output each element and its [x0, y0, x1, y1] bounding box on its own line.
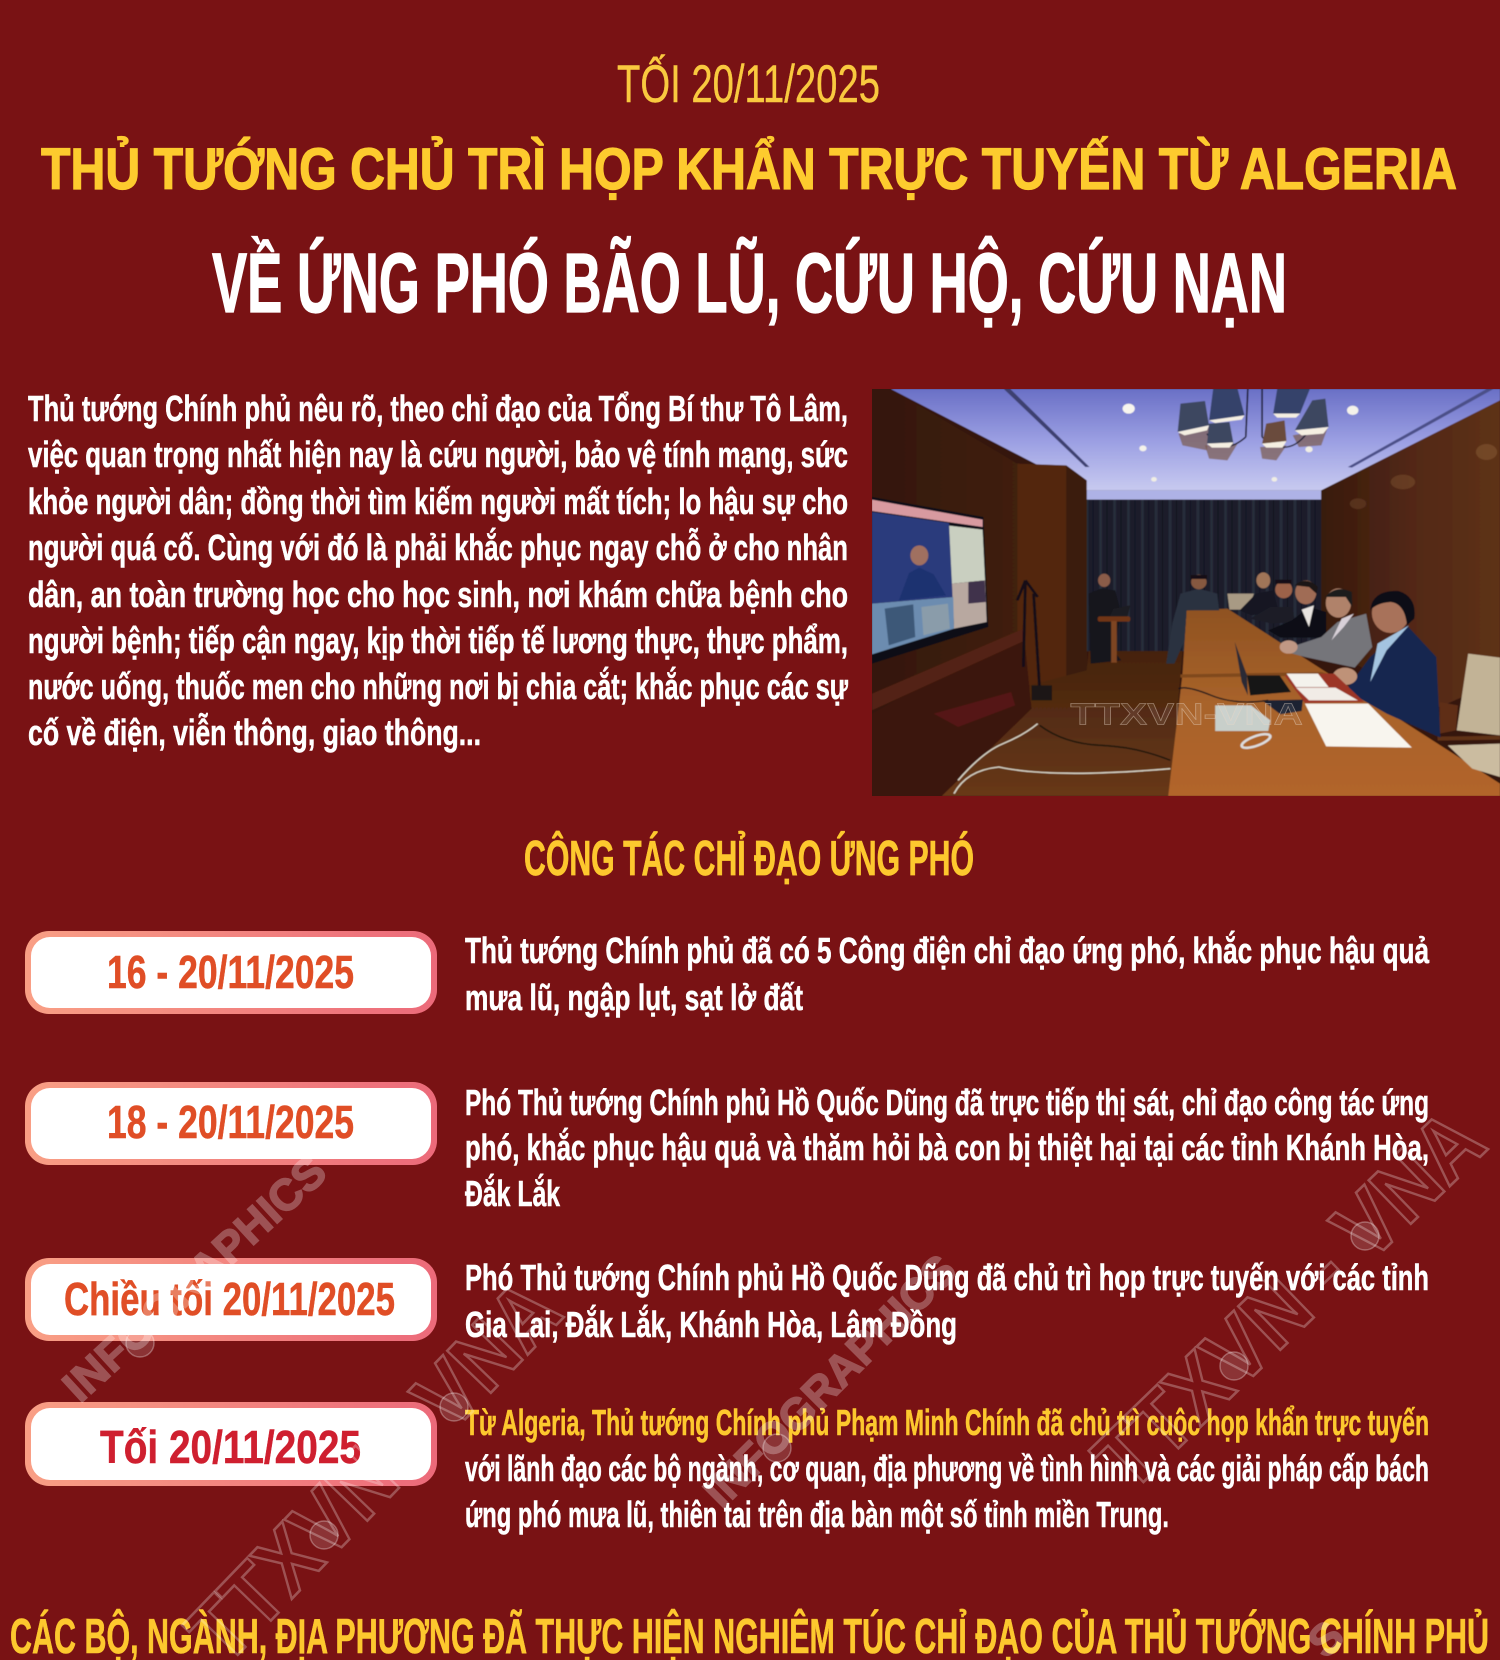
date pill 3: Chiều tối 20/11/2025: [64, 1273, 395, 1325]
photo: meeting room: [872, 389, 1500, 796]
intro text block: khỏe người dân; đồng thời tìm kiếm người mất tích; lo hậu sự cho: [28, 481, 848, 522]
intro text block: người quá cố. Cùng với đó là phải khắc phục ngay chỗ ở cho nhân: [28, 526, 848, 568]
description 3: Gia Lai, Đắk Lắk, Khánh Hòa, Lâm Đồng: [465, 1303, 957, 1345]
intro text block: [28, 388, 849, 753]
watermarks: [54, 1090, 1500, 1660]
description 1: [465, 929, 1430, 1018]
description 2: Đắk Lắk: [465, 1172, 561, 1214]
intro text block: người bệnh; tiếp cận ngay, kịp thời tiếp tế lương thực, thực phẩm,: [28, 620, 848, 661]
description 1: mưa lũ, ngập lụt, sạt lở đất: [465, 977, 803, 1018]
date pill 2: [25, 1082, 437, 1165]
date heading: TỐI 20/11/2025: [617, 54, 880, 114]
intro text block: dân, an toàn trường học cho học sinh, nơi khám chữa bệnh cho: [28, 574, 848, 615]
date pill 2: 18 - 20/11/2025: [107, 1096, 354, 1148]
date pill 1: 16 - 20/11/2025: [107, 946, 354, 998]
intro text block: việc quan trọng nhất hiện nay là cứu người, bảo vệ tính mạng, sức: [28, 434, 848, 475]
intro text block: cố về điện, viễn thông, giao thông...: [28, 712, 481, 753]
description 3: [465, 1257, 1429, 1345]
date pill 1: [25, 931, 437, 1014]
description 4: [465, 1402, 1429, 1535]
intro text block: Thủ tướng Chính phủ nêu rõ, theo chỉ đạo của Tổng Bí thư Tô Lâm,: [28, 388, 848, 429]
photo: meeting room: TTXVN-VNA: [1070, 697, 1303, 731]
description 2: [465, 1082, 1429, 1214]
section heading: CÔNG TÁC CHỈ ĐẠO ỨNG PHÓ: [524, 831, 974, 886]
title block: [41, 54, 1457, 330]
timeline row 1: [25, 929, 1430, 1018]
timeline row 2: [25, 1082, 1429, 1214]
timeline row 3: [25, 1257, 1429, 1345]
description 4: ứng phó mưa lũ, thiên tai trên địa bàn một số tỉnh miền Trung.: [465, 1494, 1169, 1535]
date pill 3: [25, 1258, 437, 1341]
watermarks: INFOGRAPHICS: [694, 1246, 966, 1517]
intro text block: nước uống, thuốc men cho những nơi bị chia cắt; khắc phục các sự: [28, 665, 849, 707]
timeline row 4: [25, 1402, 1429, 1535]
date pill 4: [25, 1402, 437, 1486]
date pill 4: Tối 20/11/2025: [100, 1421, 361, 1473]
watermarks: INFOGRAPHICS: [54, 1147, 336, 1411]
